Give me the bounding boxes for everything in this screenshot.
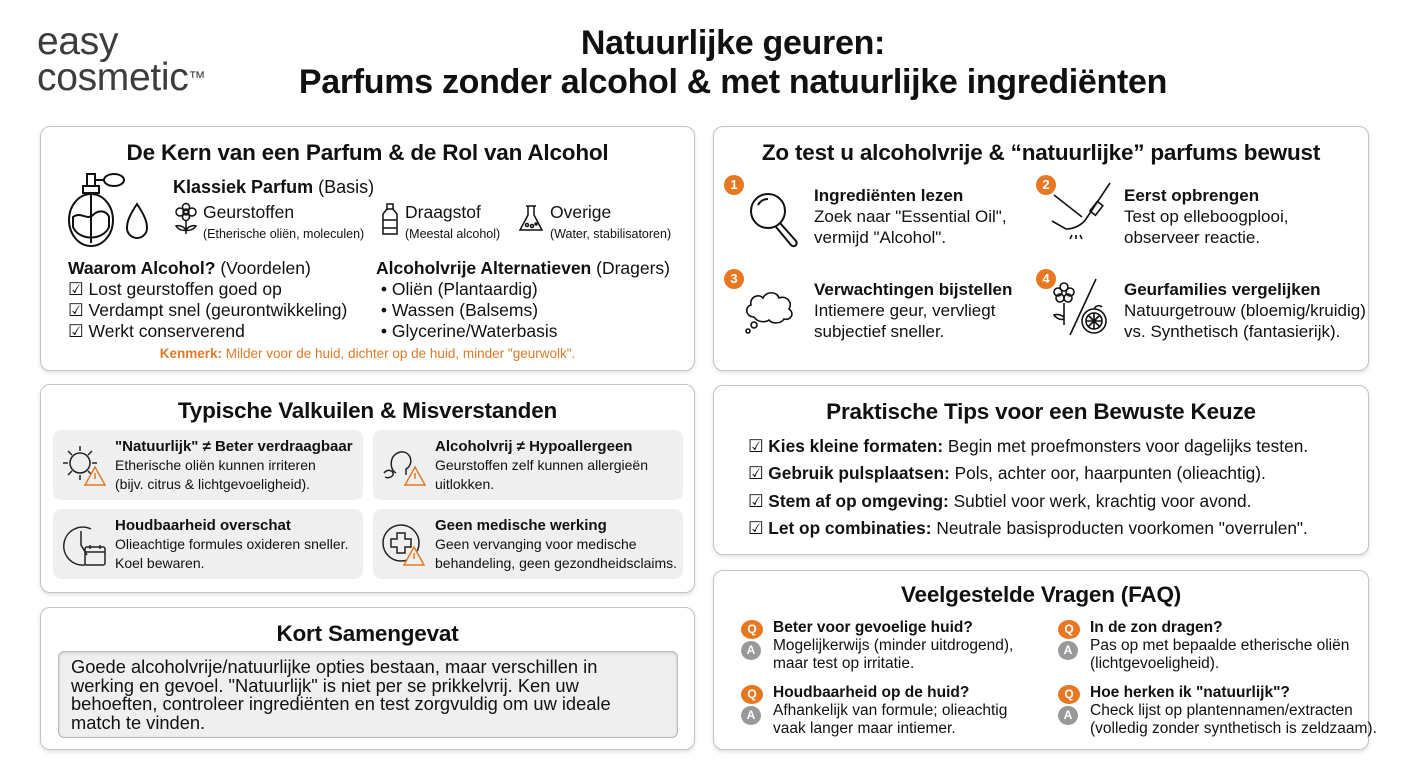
faq 1: maar test op irritatie. xyxy=(773,655,914,672)
summary box: Goede alcoholvrije/natuurlijke opties bestaan, maar verschillen in werking en gevoel. "Natuurlijk" is niet per se prikkelvrij. Ken uw behoeften, controleer ingrediënten en test zorgvuldig om uw ideale match te vinden. xyxy=(71,656,611,732)
heading: Kort Samengevat xyxy=(276,621,459,646)
heading: De Kern van een Parfum & de Rol van Alcohol xyxy=(127,140,608,165)
step 4 xyxy=(1036,269,1366,341)
step 2: Eerst opbrengen xyxy=(1124,186,1259,205)
icon: flower xyxy=(174,202,198,234)
step 3: 3 xyxy=(730,271,738,286)
panel: faq xyxy=(713,570,1369,750)
faq 2: (lichtgevoeligheid). xyxy=(1090,655,1219,672)
heading: Typische Valkuilen & Misverstanden xyxy=(178,398,557,423)
step 1: vermijd "Alcohol". xyxy=(814,228,946,247)
panel: valkuilen xyxy=(40,384,695,593)
panel: de kern: (Water, stabilisatoren) xyxy=(550,227,671,241)
alternatieven: • Wassen (Balsems) xyxy=(381,300,538,320)
step 1 xyxy=(724,175,1007,248)
faq 2 xyxy=(1058,619,1349,672)
waarom alcohol xyxy=(68,258,347,341)
logo: cosmetic™ xyxy=(37,56,205,99)
logo xyxy=(37,20,205,99)
faq 4 xyxy=(1058,684,1377,737)
alternatieven: • Oliën (Plantaardig) xyxy=(381,279,538,299)
panel: kort samengevat xyxy=(40,607,695,750)
icon: perfume bottle xyxy=(68,173,148,247)
faq 2: In de zon dragen? xyxy=(1090,619,1223,636)
tips list: ☑ Let op combinaties: Neutrale basisproducten voorkomen "overrulen". xyxy=(748,518,1308,538)
faq 1 xyxy=(741,619,1013,672)
klassiek parfum: Klassiek Parfum (Basis) xyxy=(173,177,374,197)
faq 2: Pas op met bepaalde etherische oliën xyxy=(1090,637,1349,654)
faq 3: A xyxy=(747,708,755,722)
logo: easy xyxy=(37,20,118,63)
kenmerk: Kenmerk: Milder voor de huid, dichter op de huid, minder "geurwolk". xyxy=(160,346,575,361)
tips list xyxy=(748,436,1308,538)
step 4: vs. Synthetisch (fantasierijk). xyxy=(1124,322,1340,341)
faq 4: Hoe herken ik "natuurlijk"? xyxy=(1090,684,1290,701)
faq 3: Q xyxy=(747,687,757,701)
step 2: 2 xyxy=(1042,177,1050,192)
faq 1: Q xyxy=(747,622,757,636)
card 2: Alcoholvrij ≠ Hypoallergeen xyxy=(435,438,632,455)
step 2 xyxy=(1036,175,1288,247)
step 3 xyxy=(724,269,1012,341)
faq 1: Mogelijkerwijs (minder uitdrogend), xyxy=(773,637,1013,654)
panel: de kern: (Etherische oliën, moleculen) xyxy=(203,227,364,241)
heading: Zo test u alcoholvrije & “natuurlijke” parfums bewust xyxy=(762,140,1320,165)
step 4: Geurfamilies vergelijken xyxy=(1124,280,1321,299)
card 1: Etherische oliën kunnen irriteren xyxy=(115,457,316,473)
step 3: Intiemere geur, vervliegt xyxy=(814,301,995,320)
panel: de kern: (Meestal alcohol) xyxy=(405,227,500,241)
faq 2: Q xyxy=(1064,622,1074,636)
faq 4: A xyxy=(1064,708,1072,722)
tips list: ☑ Kies kleine formaten: Begin met proefmonsters voor dagelijks testen. xyxy=(748,436,1308,456)
waarom alcohol: Waarom Alcohol? (Voordelen) xyxy=(68,258,311,278)
card 4 xyxy=(373,509,683,579)
icon: flask xyxy=(518,205,544,231)
faq 3: Afhankelijk van formule; olieachtig xyxy=(773,702,1007,719)
step 3: Verwachtingen bijstellen xyxy=(814,280,1012,299)
faq 3: vaak langer maar intiemer. xyxy=(773,720,956,737)
title: Natuurlijke geuren: xyxy=(581,24,885,62)
panel: de kern: Draagstof xyxy=(405,202,481,222)
title xyxy=(299,24,1167,101)
card 1: (bijv. citrus & lichtgevoeligheid). xyxy=(115,476,310,492)
faq 1: Beter voor gevoelige huid? xyxy=(773,619,973,636)
panel: de kern: Geurstoffen xyxy=(203,202,294,222)
faq 4: Check lijst op plantennamen/extracten xyxy=(1090,702,1353,719)
step 4: 4 xyxy=(1042,271,1050,286)
faq 2: A xyxy=(1064,643,1072,657)
card 2 xyxy=(373,430,683,500)
card 3: Koel bewaren. xyxy=(115,555,205,571)
card 4: behandeling, geen gezondheidsclaims. xyxy=(435,555,677,571)
step 1: Zoek naar "Essential Oil", xyxy=(814,207,1007,226)
faq 3 xyxy=(741,684,1007,737)
tips list: ☑ Gebruik pulsplaatsen: Pols, achter oor, haarpunten (olieachtig). xyxy=(748,463,1266,483)
card 3: Houdbaarheid overschat xyxy=(115,517,291,534)
card 2: uitlokken. xyxy=(435,476,494,492)
alternatieven xyxy=(376,258,670,341)
panel: de kern xyxy=(40,126,695,371)
card 1: "Natuurlijk" ≠ Beter verdraagbaar xyxy=(115,438,353,455)
icon: bottle xyxy=(382,203,398,235)
waarom alcohol: ☑ Verdampt snel (geurontwikkeling) xyxy=(68,300,347,320)
step 4: Natuurgetrouw (bloemig/kruidig) xyxy=(1124,301,1366,320)
tips list: ☑ Stem af op omgeving: Subtiel voor werk, krachtig voor avond. xyxy=(748,491,1251,511)
faq 3: Houdbaarheid op de huid? xyxy=(773,684,969,701)
alternatieven: • Glycerine/Waterbasis xyxy=(381,321,558,341)
heading: Praktische Tips voor een Bewuste Keuze xyxy=(826,399,1256,424)
card 4: Geen medische werking xyxy=(435,517,607,534)
card 3: Olieachtige formules oxideren sneller. xyxy=(115,536,348,552)
card 2: Geurstoffen zelf kunnen allergieën xyxy=(435,457,648,473)
step 1: Ingrediënten lezen xyxy=(814,186,963,205)
waarom alcohol: ☑ Werkt conserverend xyxy=(68,321,245,341)
faq 1: A xyxy=(747,643,755,657)
title: Parfums zonder alcohol & met natuurlijke ingrediënten xyxy=(299,63,1167,101)
panel: zo test u xyxy=(713,126,1369,371)
faq 4: Q xyxy=(1064,687,1074,701)
card 4: Geen vervanging voor medische xyxy=(435,536,637,552)
heading: Veelgestelde Vragen (FAQ) xyxy=(901,582,1181,607)
faq 4: (volledig zonder synthetisch is zeldzaam). xyxy=(1090,720,1377,737)
card 1 xyxy=(53,430,363,500)
alternatieven: Alcoholvrije Alternatieven (Dragers) xyxy=(376,258,670,278)
step 3: subjectief sneller. xyxy=(814,322,944,341)
panel: de kern: Overige xyxy=(550,202,611,222)
panel: praktische tips xyxy=(713,385,1369,555)
waarom alcohol: ☑ Lost geurstoffen goed op xyxy=(68,279,282,299)
step 1: 1 xyxy=(730,177,738,192)
step 2: observeer reactie. xyxy=(1124,228,1260,247)
card 3 xyxy=(53,509,363,579)
step 2: Test op elleboogplooi, xyxy=(1124,207,1288,226)
